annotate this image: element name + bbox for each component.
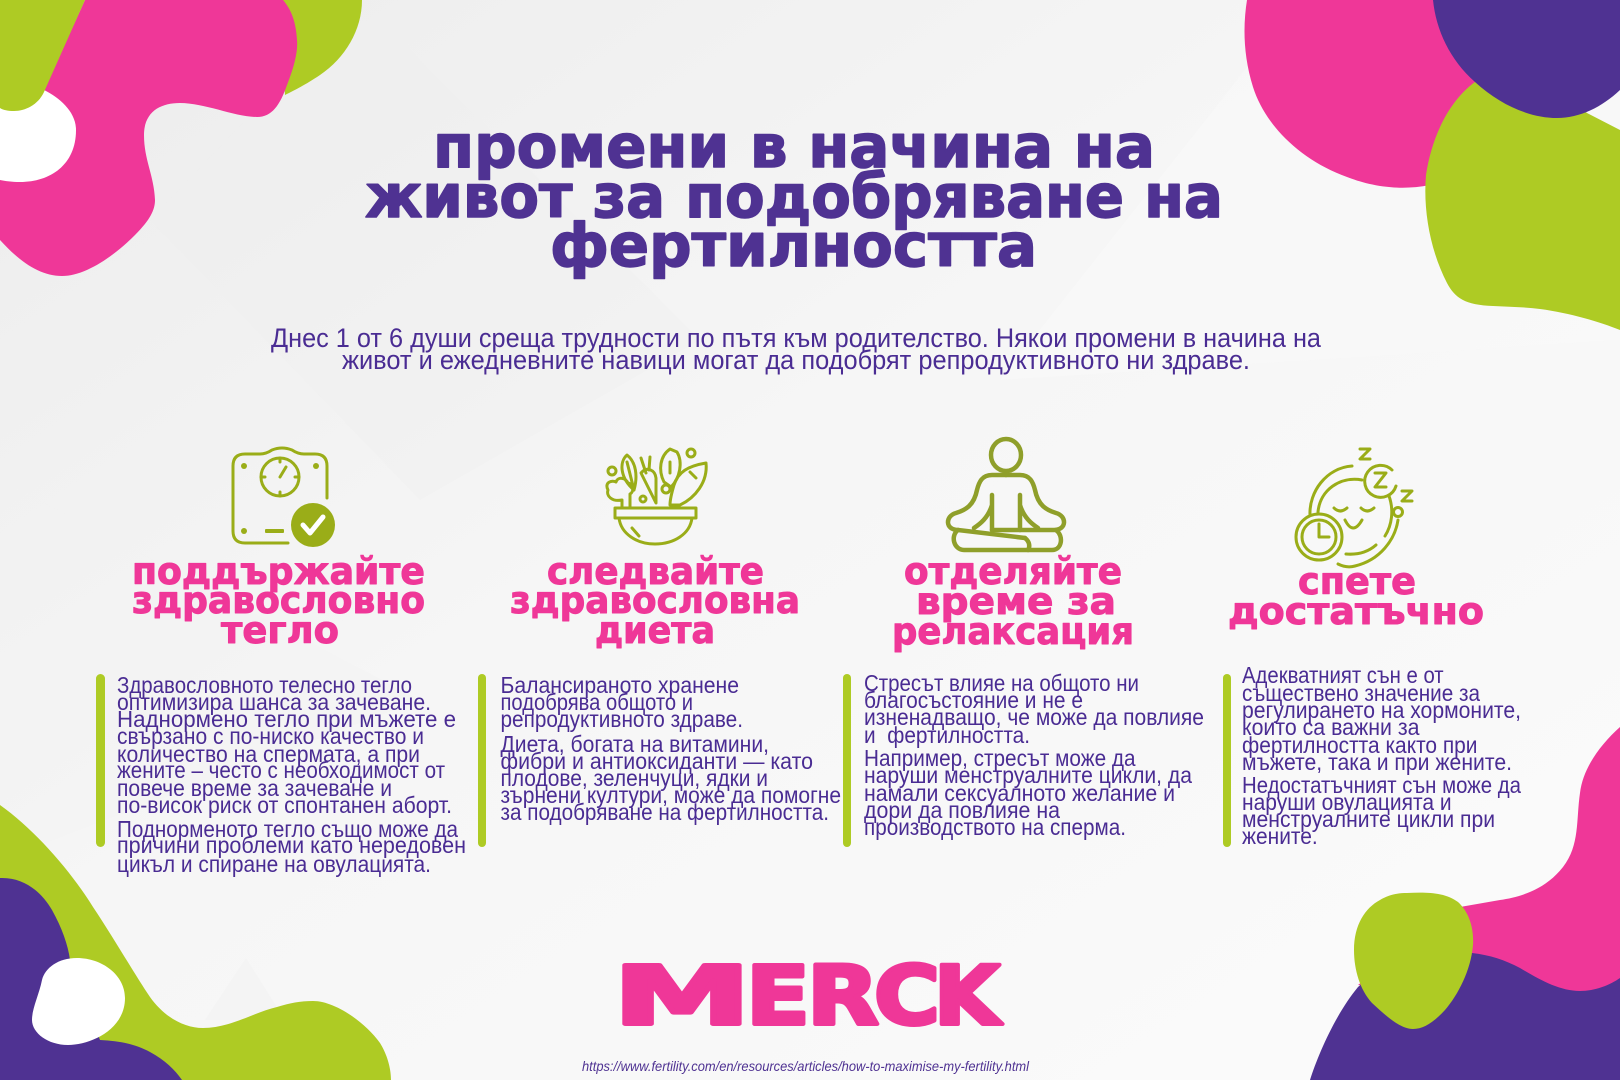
- body text: relaxation: и фертилността.: [864, 722, 1030, 748]
- accent bar: [478, 674, 486, 847]
- body text: sleep: менструалните цикли при: [1242, 806, 1495, 832]
- accent bar: [1223, 674, 1231, 847]
- heading: sleep: [1228, 560, 1484, 633]
- body text: healthy weight: причини проблеми като нередовен: [117, 832, 466, 858]
- intro text: Днес 1 от 6 души среща трудности по пътя към родителство. Някои промени в начина на: [271, 323, 1322, 353]
- body text: sleep: жените.: [1242, 823, 1318, 849]
- body text: relaxation: наруши менструалните цикли, да: [864, 762, 1192, 788]
- body text: healthy weight: Здравословното телесно тегло: [117, 672, 412, 698]
- body text: healthy diet: фибри и антиоксиданти — като: [500, 748, 813, 774]
- body text: relaxation: производството на сперма.: [864, 814, 1126, 840]
- body text: healthy weight: повече време за зачеване и: [117, 775, 392, 801]
- intro text: живот и ежедневните навици могат да подобрят репродуктивното ни здраве.: [342, 345, 1250, 375]
- heading: healthy weight: тегло: [221, 609, 339, 652]
- body text: healthy diet: зърнени култури, може да помогне: [500, 782, 841, 808]
- body text: healthy weight: оптимизира шанса за зачеване.: [117, 689, 431, 715]
- logo: Merck: C: [874, 950, 940, 1044]
- body text: relaxation: Например, стресът може да: [864, 745, 1136, 771]
- body text: relaxation: изненадващо, че може да повлияе: [864, 704, 1204, 730]
- logo: Merck: K: [934, 950, 1003, 1044]
- logo: Merck: M: [613, 950, 751, 1044]
- body text: healthy weight: цикъл и спиране на овулацията.: [117, 851, 431, 877]
- heading: relaxation: релаксация: [892, 610, 1134, 653]
- body text: healthy diet: за подобряване на фертилността.: [500, 799, 829, 825]
- body text: relaxation: [864, 670, 1204, 840]
- heading: healthy diet: диета: [595, 609, 715, 652]
- body text: relaxation: намали сексуалното желание и: [864, 780, 1175, 806]
- body text: healthy weight: свързано с по-ниско качество и: [117, 723, 424, 749]
- body text: sleep: Адекватният сън е от: [1242, 662, 1444, 688]
- body text: healthy diet: плодове, зеленчуци, ядки и: [500, 765, 768, 791]
- body text: healthy diet: Диета, богата на витамини,: [500, 731, 769, 757]
- decoration: top-left blobs: [0, 0, 362, 276]
- heading: sleep: достатъчно: [1228, 590, 1484, 633]
- body text: sleep: [1242, 662, 1521, 849]
- icon: meditating person: [948, 439, 1064, 550]
- body text: sleep: съществено значение за: [1242, 680, 1480, 706]
- source url: https://www.fertility.com/en/resources/articles/how-to-maximise-my-fertility.html: [582, 1058, 1030, 1074]
- body text: sleep: регулирането на хормоните,: [1242, 697, 1521, 723]
- accent bar: [96, 674, 105, 847]
- accent bar: [843, 674, 851, 847]
- heading: healthy weight: поддържайте: [132, 550, 425, 593]
- icon: salad bowl: [607, 449, 706, 544]
- body text: healthy diet: подобрява общото и: [500, 689, 693, 715]
- body text: sleep: които са важни за: [1242, 714, 1420, 740]
- body text: healthy diet: репродуктивното здраве.: [500, 706, 743, 732]
- body text: healthy weight: по-висок риск от спонтанен аборт.: [117, 792, 452, 818]
- body text: healthy diet: [500, 672, 841, 825]
- decoration: top-right blobs: [1245, 0, 1620, 330]
- title: фертилността: [550, 211, 1037, 281]
- logo: Merck: R: [807, 950, 879, 1044]
- title: живот за подобряване на: [365, 162, 1223, 232]
- panel: sleep: [1223, 449, 1521, 849]
- body text: sleep: фертилността както при: [1242, 732, 1478, 758]
- body text: healthy diet: Балансираното хранене: [500, 672, 739, 698]
- panel: relaxation: [843, 439, 1204, 847]
- body text: relaxation: благосъстояние и не е: [864, 687, 1083, 713]
- heading: relaxation: отделяйте: [904, 550, 1122, 593]
- heading: relaxation: [892, 550, 1134, 653]
- heading: healthy diet: здравословна: [510, 579, 800, 622]
- body text: healthy weight: Поднорменото тегло също може да: [117, 816, 458, 842]
- panel: healthy weight: [96, 448, 466, 877]
- icon: scale with check mark: [233, 448, 335, 547]
- body text: relaxation: Стресът влияе на общото ни: [864, 670, 1139, 696]
- heading: sleep: спете: [1298, 560, 1416, 603]
- heading: healthy diet: [510, 550, 800, 652]
- body text: relaxation: дори да повлияе на: [864, 797, 1060, 823]
- body text: healthy weight: количество на спермата, а при: [117, 741, 420, 767]
- body text: sleep: мъжете, така и при жените.: [1242, 749, 1512, 775]
- icon: sleeping face with clock: [1296, 449, 1412, 567]
- decoration: bottom-left blobs: [0, 805, 391, 1080]
- panel: healthy diet: [478, 449, 841, 847]
- body text: sleep: Недостатъчният сън може да: [1242, 772, 1521, 798]
- body text: healthy weight: [117, 672, 466, 877]
- heading: healthy weight: [132, 550, 425, 652]
- title: [365, 112, 1223, 281]
- decoration: bottom-right blobs: [1310, 727, 1620, 1080]
- logo: Merck: E: [746, 950, 810, 1044]
- body text: healthy weight: жените – често с необходимост от: [117, 757, 445, 783]
- intro text: [271, 323, 1322, 375]
- heading: relaxation: време за: [916, 580, 1116, 623]
- body text: sleep: наруши овулацията и: [1242, 789, 1452, 815]
- body text: healthy weight: Наднормено тегло при мъжете е: [117, 706, 456, 732]
- heading: healthy weight: здравословно: [132, 579, 425, 622]
- title: промени в начина на: [433, 112, 1155, 182]
- heading: healthy diet: следвайте: [547, 550, 764, 593]
